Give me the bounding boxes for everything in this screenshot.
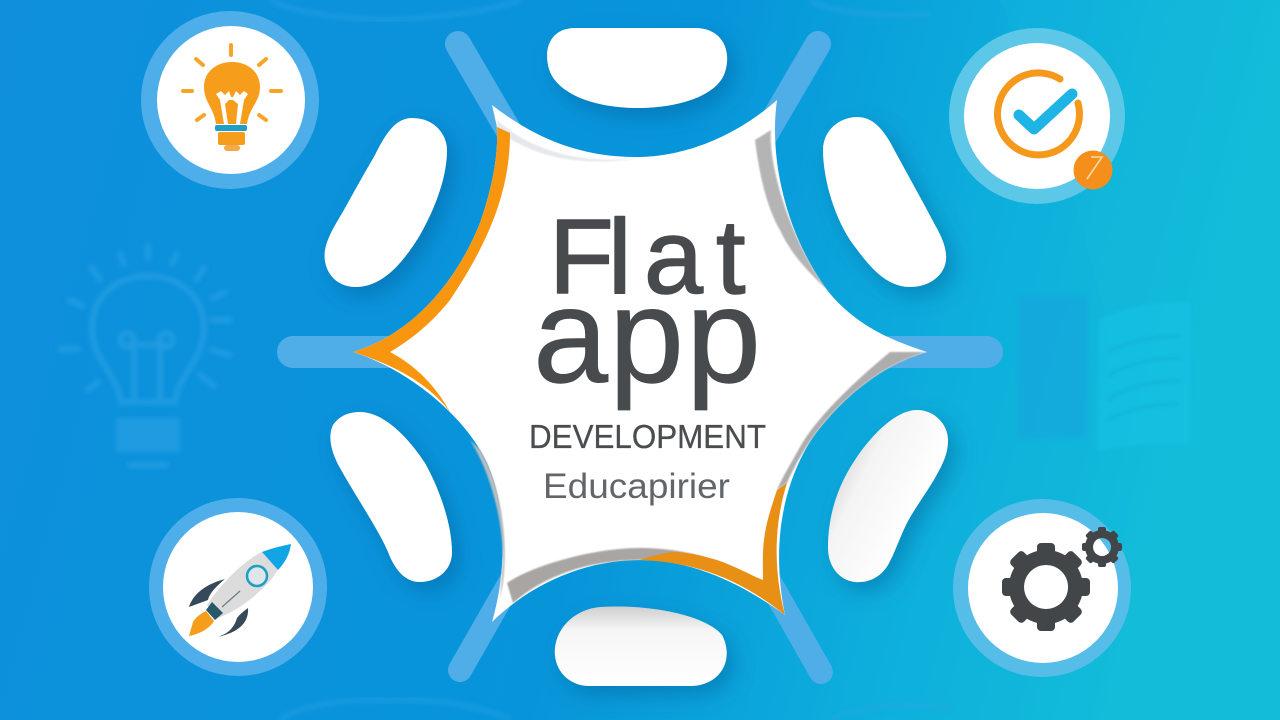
petal: lower right <box>828 410 948 582</box>
star: grey fold upper right <box>755 130 827 290</box>
star: top fold <box>497 120 640 162</box>
star: grey fold bottom <box>507 548 707 603</box>
icon: small gear <box>1082 527 1122 567</box>
subtitle: DEVELOPMENT: DEVELOPMENT <box>529 418 766 455</box>
ring <box>141 11 319 189</box>
faint icon: top books <box>270 0 930 20</box>
disc <box>964 43 1110 189</box>
ring <box>953 499 1131 677</box>
icon: large gear <box>1002 543 1090 631</box>
icon: orange dot <box>1074 150 1112 190</box>
background: right panel tint <box>1000 0 1280 720</box>
disc <box>157 26 305 174</box>
title: app: app <box>533 260 761 411</box>
petal: upper left <box>325 118 447 287</box>
star: grey fold lower right <box>777 352 927 490</box>
ring <box>949 28 1125 204</box>
ring <box>149 498 327 676</box>
badge: lightbulb <box>141 11 319 189</box>
petal: bottom <box>555 607 727 686</box>
faint icon: open book right <box>1019 296 1190 452</box>
title: Flat: Flat <box>549 198 745 316</box>
petal: top <box>547 28 727 108</box>
badge: gears <box>953 499 1131 677</box>
brand: Educapirier: Educapirier <box>543 467 730 506</box>
icon: rocket <box>189 544 291 637</box>
star: orange edge left <box>353 127 510 412</box>
icon: lightbulb <box>183 45 281 151</box>
star: grey fold lower left <box>470 440 505 598</box>
badge: checkmark <box>949 28 1125 204</box>
star: orange fold lower right <box>640 483 787 615</box>
petal: upper right <box>823 117 946 287</box>
star: body <box>353 100 927 622</box>
faint icon: lightbulb <box>60 246 230 465</box>
petal: lower left <box>330 412 452 582</box>
faint icon: bottom books <box>280 700 950 720</box>
connector lines <box>293 44 987 672</box>
central star badge <box>353 100 927 622</box>
disc <box>163 512 313 662</box>
disc <box>968 513 1118 663</box>
icon: check <box>1019 94 1072 129</box>
badge: rocket <box>149 498 327 676</box>
icon: progress ring <box>997 73 1079 155</box>
